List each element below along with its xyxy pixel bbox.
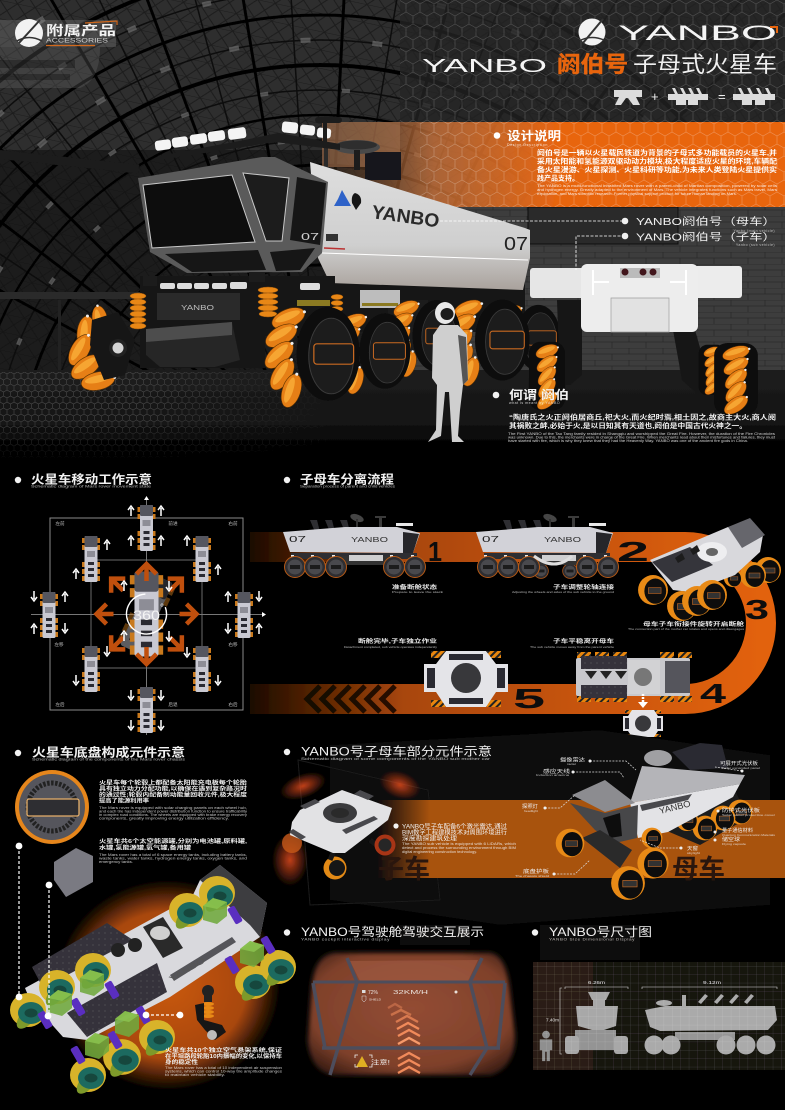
panel: cockpit display (308, 953, 515, 1075)
heading: size drawing (532, 925, 652, 942)
rover positions (40, 505, 253, 733)
icon: badge logo (15, 19, 43, 47)
text block: what is YANBO: what is meant by YANBO (509, 401, 560, 405)
direction labels: 右后 (228, 701, 238, 708)
body branding (326, 190, 528, 254)
text block: sub vehicle: The YANBO sub vehicle is equipped with 6 LiDARs, which (402, 842, 516, 846)
title (422, 52, 776, 74)
far side wheels (394, 300, 558, 386)
design description text: 阏伯号是一辆以火星载民铁道为背景的子母式多功能载员的火星车,并 (537, 148, 777, 157)
glow behind chassis (56, 880, 280, 1090)
heading: separation process: 子母车分离流程 (300, 472, 394, 486)
design description text: The YANBO is a multi-functional inhabited Mars rover with a parent-child of Martian composition, powered by solar cells (537, 184, 777, 188)
design description text: Design Description (507, 143, 548, 147)
step 4 down arrow (638, 694, 648, 708)
step 1 caption (392, 583, 444, 594)
step 2 caption (512, 583, 615, 594)
step numbers (428, 536, 769, 714)
panel: design description orange band (330, 122, 785, 207)
text block: what is YANBO: was unknown. Due to this, the merchants were in charge of the Great Fire. When merchants read about their misfortunes and failures, they must (508, 436, 775, 440)
text block: sub vehicle: YANBO号子车配备6个激光雷达,通过 (402, 822, 507, 830)
callout: sub vehicle label: YANBO阏伯号（子车） (636, 230, 776, 244)
cabin: 07 (301, 232, 320, 243)
title: YANBO (422, 55, 547, 76)
heading: parts of sub and mother vehicles: YANBO号子母车部分元件示意 (301, 744, 492, 758)
design description text: 设计说明 (507, 128, 561, 143)
text block: energy tanks: emergency tanks. (99, 860, 133, 864)
badge subheading: ACCESSORIES (46, 38, 108, 44)
text block: what is YANBO: 其祸败之衅,必始于火,是以日知其有天道也,阏伯是中国古代火神之一。 (509, 421, 747, 430)
callouts on mother vehicle: 可展开式光伏板 (720, 760, 758, 767)
design description text (494, 128, 777, 196)
text block: air suspension: 身的稳定性 (165, 1058, 199, 1066)
callouts on mother vehicle: 量子通信材料 (722, 827, 753, 834)
text block: sub vehicle: digital engineering construction technology. (402, 850, 477, 854)
HUD readouts: 72% (368, 990, 378, 996)
cabin (138, 157, 328, 273)
heading: movement diagram (15, 472, 152, 488)
text block: air suspension (165, 1046, 283, 1077)
background: hangar hero (0, 0, 785, 370)
direction labels: 前进 (168, 520, 178, 527)
panel: orange band of components (375, 800, 785, 878)
illustration: mother vehicle isometric: YANBO (658, 798, 692, 816)
callout: sub vehicle label: Yanbo (sub vehicle) (736, 243, 775, 247)
body branding: YANBO (370, 202, 441, 232)
callouts on mother vehicle: Quantum Communication Materials (722, 833, 776, 837)
text block: sub vehicle: BIM数字工程建模技术对周围环境进行 (402, 828, 507, 836)
front chassis (140, 272, 335, 368)
HUD readouts (362, 990, 458, 1002)
title: 子母式火星车 (633, 52, 777, 77)
callout: main vehicle label: Yanbo (main vehicle) (734, 229, 775, 233)
chart: dimension drawing: 9.12m (703, 980, 721, 985)
step 4: top view with sub leaving (530, 637, 692, 737)
human scale figure (540, 1031, 552, 1061)
formula icons: sub + mother = combined: + (651, 89, 659, 104)
direction labels: 左移 (54, 641, 64, 648)
callouts on mother vehicle: 防护式光伏板 (722, 807, 760, 814)
title: 阏伯号 (557, 52, 628, 77)
step 5 caption: Detachment completed, sub vehicle operates independently (344, 645, 438, 649)
HUD chevrons (388, 1004, 420, 1073)
chart: rover movement diagram (31, 496, 266, 735)
legs (557, 300, 701, 392)
step 1 caption: Prepare to leave the stack (392, 590, 444, 594)
heading: cockpit display: YANBO号驾驶舱驾驶交互展示 (301, 924, 484, 939)
heading: cockpit display (284, 924, 484, 942)
background: faint ghost vehicle (298, 730, 770, 960)
red glows near sub vehicle (272, 764, 425, 886)
big label: sub vehicle: 子车 (378, 854, 430, 884)
step 2 caption: Adjusting the wheels and axles of the sub vehicle to the ground (512, 590, 614, 594)
text block: wheel power: 火星车每个轮毂上都配备太阳能充电板每个轮胎 (99, 778, 248, 786)
undercarriage shadow (335, 282, 525, 350)
direction labels: 左后 (55, 701, 65, 708)
callouts on mother vehicle: The chassis shield (515, 874, 550, 878)
heading: chassis components: 火星车底盘构成元件示意 (32, 744, 185, 760)
heading: separation process: Separation process of parent and child vehicles (300, 484, 395, 488)
text block: wheel power (99, 778, 248, 820)
text block: wheel power: 提高了能源利用率 (99, 796, 150, 804)
text block: sub vehicle (393, 822, 516, 854)
top right logo (578, 18, 777, 46)
top right logo: YANBO (618, 22, 777, 45)
illustration: chassis isometric (10, 865, 296, 1097)
text block: wheel power: 的通过性;轮毂内配备制动能量回收元件,极大程度 (99, 790, 248, 798)
step numbers: 1 (428, 536, 442, 567)
callouts on mother vehicle: 天窗 (687, 845, 698, 852)
text block: energy tanks (99, 837, 248, 864)
step numbers: 2 (617, 536, 649, 567)
text block: what is YANBO (493, 387, 776, 443)
step 5 caption: 断舱完毕,子车独立作业 (358, 637, 438, 645)
heading: separation process (284, 472, 395, 488)
direction labels: 右前 (228, 520, 238, 527)
text block: wheel power: components, greatly improving energy utilization efficiency. (99, 816, 229, 820)
callout: main vehicle label: YANBO阏伯号（母车） (636, 215, 776, 228)
step 2: rover side view with lowered wheels (476, 512, 618, 594)
step 3: rover isometric (628, 518, 781, 631)
warning icon (355, 1055, 390, 1067)
step 4 caption (530, 637, 615, 649)
callouts on mother vehicle: 探照灯 (522, 803, 538, 810)
text block: air suspension: systems, which can control 10-way tire amplitude changes (165, 1070, 283, 1074)
direction labels: 后退 (168, 701, 178, 708)
callout: main vehicle label (440, 215, 776, 233)
callout: sub vehicle label (576, 230, 776, 270)
text block: air suspension: 在平坦路段轮胎10内振幅的变化,以保持车 (165, 1052, 283, 1060)
step 3 caption: The connection part of the mother car rotates and opens and disengages (628, 627, 745, 631)
360 rotation badge: ° (160, 603, 164, 614)
step 1: rover side view (283, 512, 444, 594)
heading: parts of sub and mother vehicles: Schematic diagram of some components of the YANBO sub mother car (301, 757, 492, 761)
side view (644, 994, 777, 1054)
360 rotation badge (126, 594, 168, 635)
illustration: sub vehicle hero (529, 264, 758, 418)
text block: wheel power: and each tire has independent power distribution function to ensure trafficability (99, 810, 248, 814)
text block: what is YANBO: 何谓 阏伯 (509, 387, 569, 402)
HUD readouts: 32KM/H (393, 990, 428, 996)
design description text: 备火星漫游、火星探测、火星科研等功能,为未来人类登陆火星提供实 (537, 165, 777, 174)
heading: movement diagram: 火星车移动工作示意 (31, 472, 152, 486)
design description text: 践产品支持。 (537, 174, 579, 182)
step 5 caption (344, 637, 438, 649)
heading: movement diagram: Schematic diagram of Mars rover movement state (31, 484, 151, 488)
step numbers: 3 (745, 594, 769, 625)
cockpit frame beams (313, 958, 505, 1075)
text block: wheel power: The Mars rover is equipped with solar charging panels on each wheel hub, (99, 806, 247, 810)
flow band: orange process track (250, 547, 761, 712)
front wheels (529, 341, 758, 418)
text block: sub vehicle: detect and process the surrounding environment through BIM (402, 846, 516, 850)
text block: what is YANBO: have started with fire, which is why they knew that they had the Heavenly Way. YANBO was one of the ancient fire gods in China. (508, 439, 748, 443)
text block: energy tanks: The Mars rover has a total of 6 space energy tanks, including battery tanks, (99, 853, 247, 857)
badge heading: 附属产品 (46, 23, 116, 38)
direction labels: 右移 (228, 641, 238, 648)
near wheels (260, 303, 410, 410)
text block: sub vehicle: 深度勘探建筑处理 (402, 834, 457, 842)
solar panel and dish on roof (322, 122, 401, 180)
text block: energy tanks: 火星车共6个太空能源罐,分别为电池罐,原料罐, (99, 837, 248, 845)
callouts on mother vehicle: Solar panel protective cover (722, 813, 775, 817)
step 5: sub vehicle top view (344, 637, 508, 707)
formula icons: sub + mother = combined (614, 88, 775, 105)
heading: parts of sub and mother vehicles (284, 744, 492, 761)
step 3 caption (628, 620, 745, 631)
heading: cockpit display: YANBO cockpit interactive display (301, 938, 390, 942)
design description text: 采用太阳能和氢能源双驱动动力模块,极大程度适应火星的环境,车辆配 (537, 156, 777, 166)
formula icons: sub + mother = combined: = (718, 89, 726, 104)
icon: wheel disc (15, 770, 89, 844)
roof light racks (154, 117, 342, 160)
orange direction arrows (96, 564, 196, 664)
front chassis: YANBO (181, 305, 215, 312)
text block: what is YANBO: “陶唐氏之火正阏伯居商丘,祀大火,而火纪时焉,相土因之,故商主大火,商人阅 (509, 412, 776, 422)
step numbers: 4 (700, 678, 727, 709)
text block: air suspension: 火星车共10个独立空气悬架系统,保证 (165, 1046, 283, 1054)
floor (0, 370, 785, 465)
chart: dimension drawing (533, 962, 785, 1070)
chart: dimension drawing: 7.40m (546, 1018, 559, 1022)
illustration: chassis isometric: YANBO (168, 956, 207, 984)
section background (22, 532, 776, 1088)
text block: what is YANBO: The First YANBO of the Tao Tang family resided in Shangqiu and worshipped the Great Fire. However, the duration of the Fire Chronicles (508, 432, 775, 436)
step 4 caption: The sub vehicle moves away from the parent vehicle (530, 645, 614, 649)
chart: dimension drawing: 6.26m (588, 980, 605, 985)
big label: mother vehicle: 母车 (672, 854, 725, 884)
direction labels: 左前 (55, 520, 65, 527)
separated sub vehicle small (623, 710, 663, 737)
callouts on mother vehicle: 感应天线 (543, 768, 570, 775)
icon: energy tank (54, 848, 93, 897)
heading: chassis components: Schematic diagram of the components of the Mars rover chassis (32, 758, 185, 762)
text block: wheel power: in complex road conditions. The wheels are equipped with brake energy recovery (99, 813, 248, 817)
callout dots and leader lines (16, 843, 183, 1019)
step 2 caption: 子车调整轮轴连接 (553, 583, 615, 591)
accessories badge (0, 19, 117, 88)
callouts on mother vehicle (515, 756, 776, 878)
text block: energy tanks: 水罐,氢能源罐,氧气罐,备用罐 (99, 844, 192, 852)
text block: air suspension: to maintain vehicle stability. (165, 1073, 225, 1077)
heading: size drawing: YANBO Size Dimensional Display (549, 938, 635, 942)
360 rotation badge: 360 (133, 607, 160, 623)
design description text: exploration, and Mars scientific research. Former physical support product for future human landing on Mars. (537, 192, 737, 196)
illustration: sub vehicle isometric (282, 790, 396, 880)
illustration: mother vehicle hero (64, 117, 561, 410)
step numbers: 5 (513, 683, 545, 714)
illustration: suspension unit (195, 985, 226, 1040)
heading: size drawing: YANBO号尺寸图 (549, 925, 652, 939)
white cargo body (310, 162, 530, 290)
design description text: and hydrogen energy. Greatly adapted to the environment of Mars. The vehicle integrates functions such as Mars travel, Mars (537, 188, 777, 192)
body (530, 264, 742, 332)
direction labels (54, 520, 238, 708)
callouts on mother vehicle: headlight (524, 809, 538, 813)
text block: energy tanks: waste tanks, water tanks, hydrogen energy tanks, oxygen tanks, and (99, 856, 247, 860)
callouts on mother vehicle: Induction antenna (536, 773, 570, 777)
HUD readouts: SHIELD (369, 998, 382, 1002)
callouts on mother vehicle: 储空球 (722, 836, 740, 843)
front view (565, 992, 628, 1054)
background: grey brick wall behind vehicles (400, 207, 785, 375)
warning icon: 注意! (371, 1058, 390, 1066)
callouts on mother vehicle: 摄像雷达 (560, 756, 585, 764)
callouts on mother vehicle: Solar expanded panel (722, 766, 761, 770)
heading: chassis components (15, 744, 185, 762)
illustration: astronaut figure (428, 302, 468, 442)
body branding: 07 (504, 234, 528, 254)
text block: wheel power: 具有独立动力分配功能,以确保在遇到复杂路况时 (99, 784, 248, 792)
step 3 caption: 母车子车衔接件旋转开启断舱 (643, 620, 745, 628)
step 1 caption: 准备断舱状态 (392, 583, 438, 591)
deck and side hull (630, 766, 745, 803)
rear-side left wheel (68, 304, 134, 391)
wheel direction arrows (31, 506, 262, 730)
callouts on mother vehicle: Flying capsule (722, 842, 747, 846)
callouts on mother vehicle: skylight (687, 851, 700, 855)
illustration: mother vehicle isometric (556, 743, 752, 900)
text block: air suspension: The Mars rover has a total of 10 independent air suspension (165, 1066, 282, 1070)
dimension lines (560, 987, 777, 1054)
callouts on mother vehicle: radar (567, 762, 576, 766)
step 4 caption: 子车平稳离开母车 (553, 637, 615, 645)
callouts on mother vehicle: 底盘护板 (523, 868, 549, 875)
shock springs (130, 287, 343, 329)
